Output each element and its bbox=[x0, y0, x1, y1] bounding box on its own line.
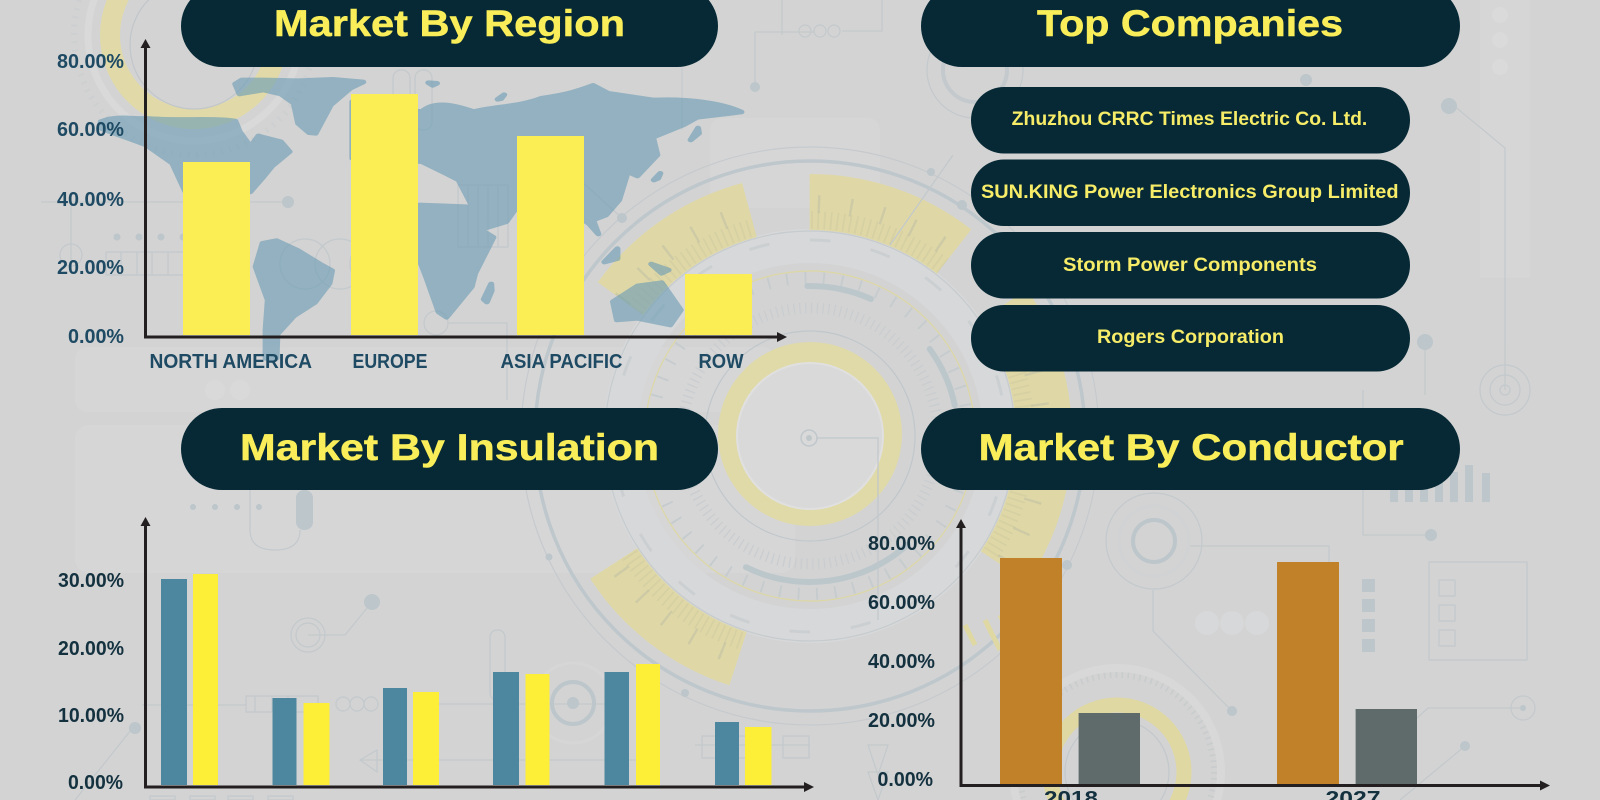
company: Zhuzhou CRRC: Zhuzhou CRRC Times Electric Co. Ltd. bbox=[1012, 109, 1367, 130]
panel: market by insulation bbox=[58, 408, 814, 794]
y axis labels: 20.00% bbox=[58, 638, 124, 660]
panel: market by conductor bbox=[868, 408, 1550, 800]
heading: top companies bbox=[921, 0, 1460, 67]
y axis labels: 20.00% bbox=[57, 257, 124, 279]
axes bbox=[956, 519, 1550, 790]
x axis labels: ASIA PACIFIC bbox=[500, 351, 622, 373]
axes bbox=[140, 39, 787, 342]
top-left gauge bbox=[74, 0, 314, 155]
company: Rogers Corporation: Rogers Corporation bbox=[1097, 327, 1284, 348]
heading: top companies: Top Companies bbox=[1037, 3, 1343, 44]
y axis labels: 0.00% bbox=[68, 326, 124, 348]
heading: market by conductor bbox=[921, 408, 1460, 490]
y axis labels: 40.00% bbox=[868, 651, 935, 673]
company: SUN.KING bbox=[971, 160, 1410, 226]
y axis labels: 80.00% bbox=[868, 533, 935, 555]
y axis labels: 30.00% bbox=[58, 570, 124, 592]
y axis labels: 0.00% bbox=[878, 769, 933, 791]
y axis labels: 0.00% bbox=[68, 772, 123, 794]
grouped bars: yellow series bbox=[193, 574, 772, 785]
bars: grey series bbox=[1079, 709, 1417, 785]
bars: orange series bbox=[1000, 558, 1339, 785]
y axis labels: 60.00% bbox=[57, 119, 124, 141]
heading: market by conductor: Market By Conductor bbox=[979, 427, 1404, 468]
heading: market by insulation: Market By Insulation bbox=[240, 427, 659, 468]
y axis labels: 80.00% bbox=[57, 51, 124, 73]
y axis labels: 40.00% bbox=[57, 189, 124, 211]
world map bbox=[101, 79, 741, 358]
central gauge bbox=[522, 146, 1098, 726]
y axis labels: 60.00% bbox=[868, 592, 935, 614]
bars bbox=[183, 94, 752, 335]
company: Storm Power Components: Storm Power Components bbox=[1063, 255, 1317, 276]
company: Zhuzhou CRRC bbox=[971, 87, 1410, 154]
x axis labels bbox=[1044, 788, 1380, 800]
heading: market by region bbox=[181, 0, 718, 67]
company: Rogers Corporation bbox=[971, 305, 1410, 372]
company: SUN.KING: SUN.KING Power Electronics Group Limited bbox=[981, 182, 1398, 203]
circuit nodes bbox=[114, 74, 1526, 751]
y axis labels: 10.00% bbox=[58, 705, 124, 727]
heading: market by region: Market By Region bbox=[274, 3, 625, 44]
panel: market by region bbox=[57, 0, 787, 373]
grouped bars: teal series bbox=[161, 579, 739, 785]
company: Storm Power Components bbox=[971, 232, 1410, 298]
panel: top companies bbox=[921, 0, 1460, 372]
y axis labels bbox=[58, 570, 124, 794]
axes bbox=[140, 517, 814, 792]
bottom gauge bbox=[1013, 668, 1221, 800]
y axis labels bbox=[57, 51, 124, 348]
x axis labels: ROW bbox=[698, 351, 744, 373]
heading: market by insulation bbox=[181, 408, 718, 490]
x axis labels bbox=[150, 351, 744, 373]
y axis labels bbox=[868, 533, 935, 791]
x axis labels: EUROPE bbox=[352, 351, 428, 373]
y axis labels: 20.00% bbox=[868, 710, 935, 732]
x axis labels: NORTH AMERICA bbox=[150, 351, 312, 373]
